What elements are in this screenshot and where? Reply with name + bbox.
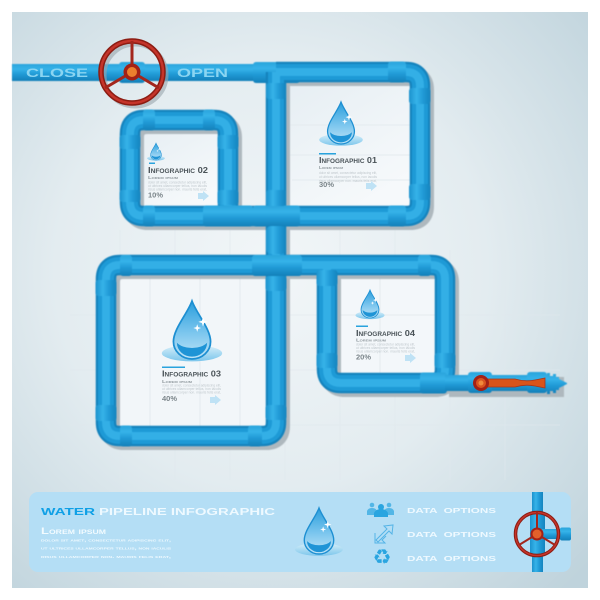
panel: infographic 04 background <box>337 275 435 373</box>
body text 01: dolor sit amet, consectetur adipiscing elit, <box>319 171 377 175</box>
body text 04: risus ullamcorper non. mauris felis erat, <box>356 350 415 354</box>
accent bar 04 <box>356 326 368 327</box>
footer body text <box>41 538 171 559</box>
heading 01: Infographic 01 <box>319 155 377 165</box>
heading 02: Infographic 02 <box>148 165 208 175</box>
percent 02: 10% <box>148 190 163 200</box>
body text 01: risus ullamcorper non. mauris felis erat, <box>319 179 377 183</box>
data options list <box>407 506 496 563</box>
body text 01 <box>319 171 377 183</box>
body text 04: ut ultrices ullamcorper tellus, non iaculis <box>356 346 415 350</box>
data options list: DATA OPTIONS <box>407 506 496 515</box>
accent bar 01 <box>319 153 336 154</box>
infographic 02 content <box>147 143 209 201</box>
icon: arrows <box>375 525 393 543</box>
body text 04: dolor sit amet, consectetur adipiscing elit, <box>356 342 415 346</box>
icon: water drop 04 <box>355 290 385 319</box>
outlet pipe and nozzle <box>445 372 567 394</box>
title <box>41 506 276 518</box>
subheading 04: Lorem ipsum <box>356 338 387 342</box>
panel: infographic 03 background <box>117 275 267 427</box>
body text 02 <box>148 180 207 192</box>
body text 02: dolor sit amet, consectetur adipiscing elit, <box>148 180 207 184</box>
body text 03: risus ullamcorper non. mauris felis erat, <box>162 390 221 394</box>
valve wheel: main <box>101 41 166 106</box>
body text 01: ut ultrices ullamcorper tellus, non iaculis <box>319 175 377 179</box>
heading 03: Infographic 03 <box>162 368 221 378</box>
subheading 02: Lorem ipsum <box>148 175 179 180</box>
open label: OPEN <box>177 68 228 80</box>
icon: water drop 01 <box>319 102 363 146</box>
icon: recycle: ♻ <box>373 545 391 569</box>
accent bar 03 <box>162 366 185 368</box>
body text 02: ut ultrices ullamcorper tellus, non iaculis <box>148 184 207 188</box>
accent bar 02 <box>149 162 155 164</box>
body text 03: ut ultrices ullamcorper tellus, non iaculis <box>162 387 221 391</box>
infographic 01 content <box>319 102 377 191</box>
icon: people <box>367 503 394 517</box>
title: PIPELINE INFOGRAPHIC <box>99 506 276 518</box>
heading 04: Infographic 04 <box>356 328 415 338</box>
body text 03 <box>162 384 221 394</box>
close label: CLOSE <box>26 68 89 80</box>
icon: water drop 03 <box>162 301 222 361</box>
body text 04 <box>356 342 415 354</box>
icon: water drop 02 <box>147 143 165 161</box>
outlet valve lever <box>473 375 545 391</box>
title: WATER <box>41 506 96 518</box>
pipe collars <box>96 62 456 446</box>
percent 01: 30% <box>319 180 334 189</box>
arrow 04 <box>405 353 416 363</box>
subheading 03: Lorem ipsum <box>162 379 193 384</box>
data options list: DATA OPTIONS <box>407 530 496 539</box>
body text 03: dolor sit amet, consectetur adipiscing elit, <box>162 384 221 388</box>
percent 03: 40% <box>162 394 177 403</box>
percent 04: 20% <box>356 352 371 362</box>
arrow 02 <box>198 191 209 201</box>
panel: infographic 01 background <box>288 82 410 207</box>
infographic 04 content <box>355 290 416 363</box>
pipe shadow <box>110 76 564 440</box>
panel: footer <box>29 492 571 572</box>
subheading 01: Lorem ipsum <box>319 165 344 170</box>
arrow 01 <box>366 181 377 191</box>
main supply pipe <box>12 62 408 83</box>
footer subheading: Lorem ipsum <box>41 526 106 536</box>
footer valve <box>516 492 571 572</box>
footer body text: dolor sit amet, consectetur adipiscing elit, <box>41 538 171 542</box>
arrow 03 <box>210 395 221 405</box>
footer body text: risus ullamcorper non. mauris felis erat, <box>41 554 171 559</box>
footer body text: ut ultrices ullamcorper tellus, non iaculis <box>41 546 171 550</box>
looped pipes <box>106 72 445 436</box>
icon: footer water drop <box>295 508 343 556</box>
infographic 03 content <box>162 301 222 405</box>
body text 02: risus ullamcorper non. mauris felis erat, <box>148 188 207 192</box>
data options list: DATA OPTIONS <box>407 554 496 563</box>
pipe network <box>12 62 567 446</box>
panel: infographic 02 background <box>141 130 218 207</box>
